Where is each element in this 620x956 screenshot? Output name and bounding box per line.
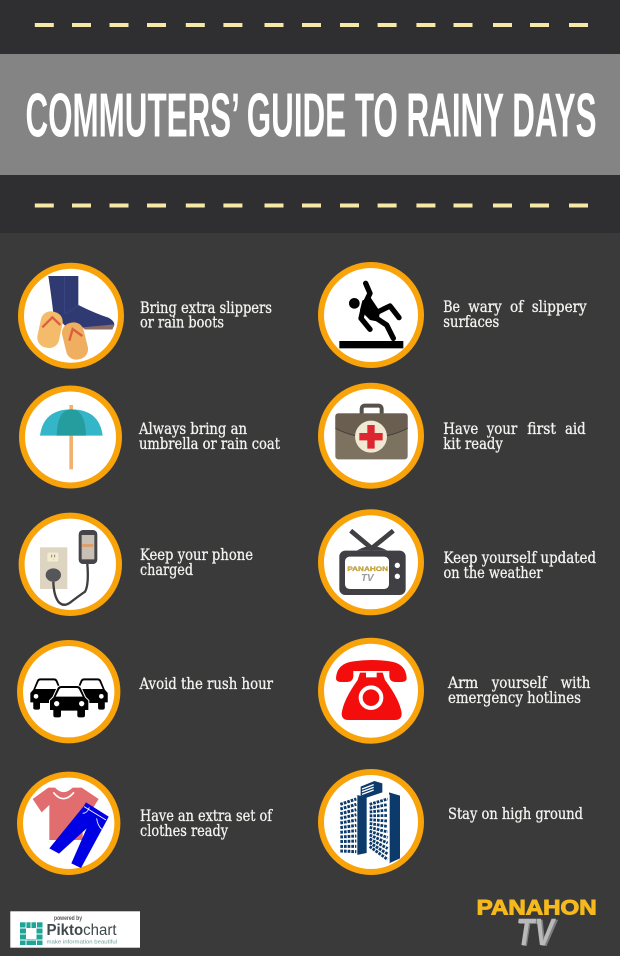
label: Be [443,298,460,316]
label: umbrella or rain coat [139,435,281,453]
label: clothes ready [140,822,228,840]
label: of [510,298,524,316]
tip: umbrella [22,388,281,486]
icon: red telephone [336,660,407,720]
logo: Piktochart: powered by [54,915,82,922]
label [140,807,273,840]
label: emergency hotlines [448,689,581,707]
label [140,546,253,579]
label: Always bring an [138,420,247,438]
label: yourself [491,674,548,692]
icon: Piktochart mark [20,922,42,945]
label: Have an extra set of [140,807,273,825]
icon: television: TV [361,573,375,584]
label: surfaces [443,313,499,331]
logo: Panahon TV: PANAHON [477,896,597,920]
logo: Piktochart [10,911,140,948]
title band [0,54,620,175]
label: your [486,420,518,438]
icon: buildings [340,781,400,863]
icon: boot and slippers [35,276,114,362]
label [140,299,272,332]
label [444,549,596,582]
label [443,420,586,453]
tip: weather updates [321,512,596,612]
header road band [0,0,620,233]
logo: Piktochart: make information beautiful [46,940,117,946]
label: on the weather [444,564,543,582]
logo: Panahon TV [477,896,597,955]
label: or rain boots [140,314,224,332]
tip: extra clothes [20,775,273,872]
icon: three cars [30,678,108,717]
tip: first aid kit [321,386,586,486]
icon: person slipping [339,283,403,348]
tip: rush hour [20,643,274,740]
label: Stay on high ground [448,805,583,823]
tip: high ground [321,772,583,872]
label: wary [468,298,502,316]
tip: slippers or rain boots [21,266,272,366]
label: Have [443,420,478,438]
icon: television [339,531,406,595]
label: slippery [532,298,587,316]
label: Keep yourself updated [444,549,596,567]
tip: slippery surfaces [321,265,587,365]
label: first [527,420,557,438]
label: aid [565,420,586,438]
logo: Piktochart: Piktochart [46,922,117,939]
label: Avoid the rush hour [139,675,274,693]
tip: emergency hotlines [321,641,590,741]
label [138,420,281,453]
tip: phone charged [22,516,253,613]
label: with [561,674,590,692]
label: kit ready [443,435,503,453]
icon: television: PANAHON [347,566,388,573]
label: Bring extra slippers [140,299,272,317]
logo: Panahon TV: TV [516,912,556,954]
logo: Panahon TV: TV [517,913,558,955]
label: Arm [447,674,479,692]
label: Keep your phone [140,546,253,564]
icon: phone charger [40,530,97,605]
icon: first aid kit [335,406,408,459]
icon: umbrella [40,405,103,469]
icon: shirt and jeans [33,788,109,868]
label [447,674,590,707]
label: charged [140,561,193,579]
label [443,298,587,331]
